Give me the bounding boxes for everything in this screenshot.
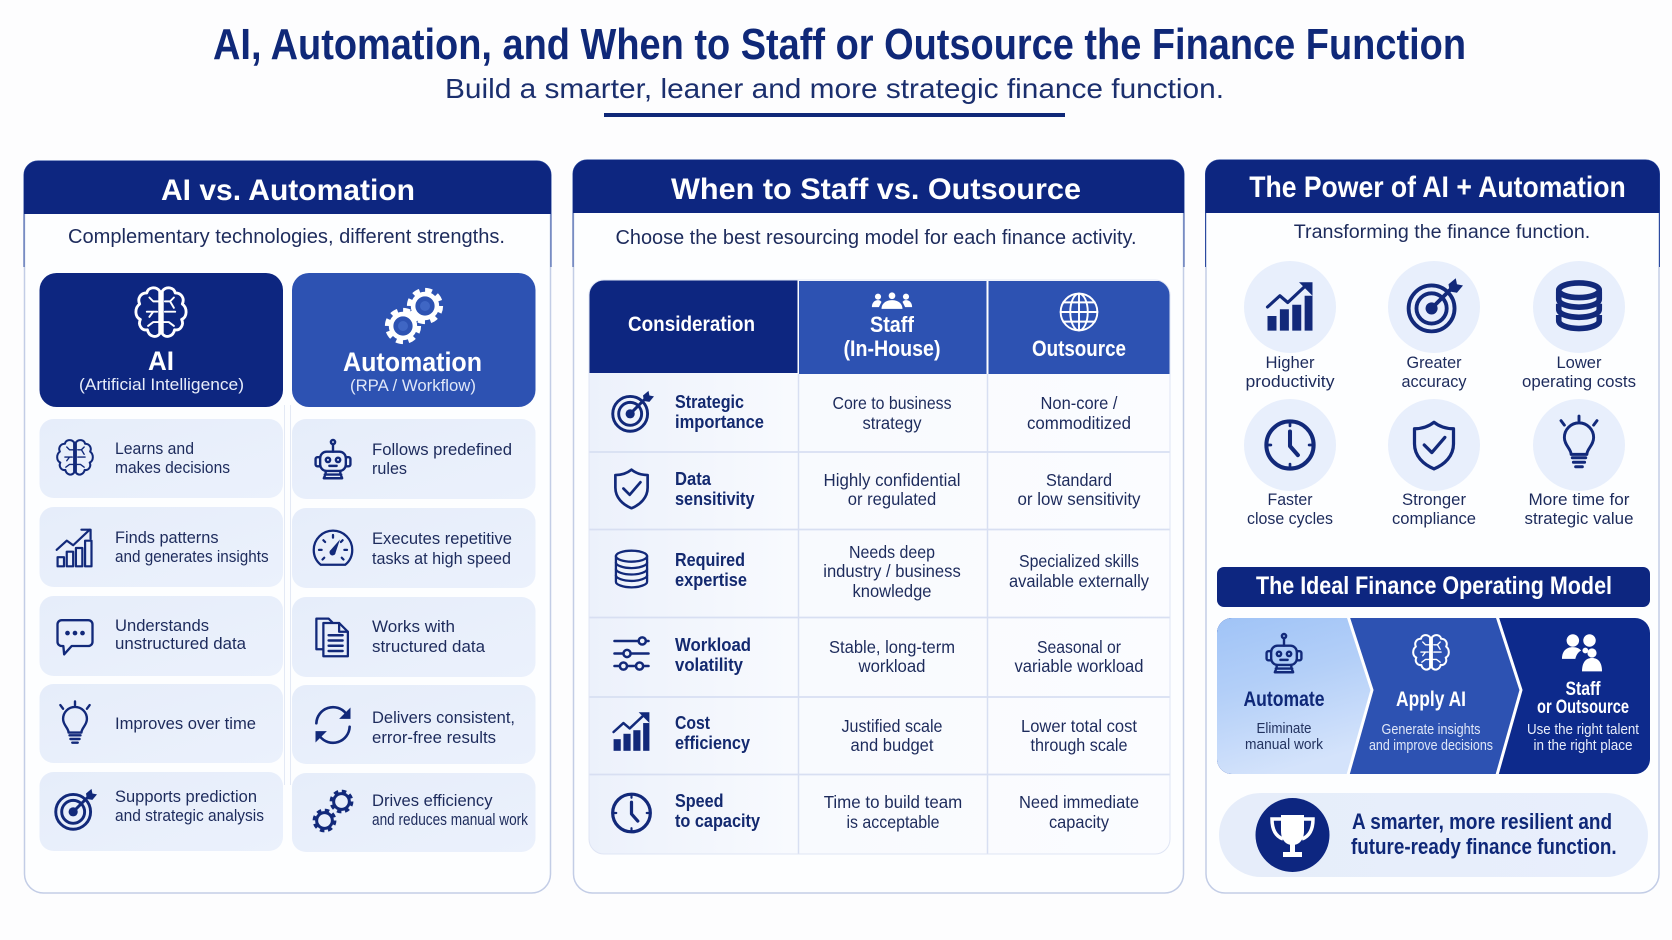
step: Staff or Outsource: Staff [1566, 679, 1601, 700]
text [115, 616, 247, 653]
benefit: Faster close cycles: Faster [1268, 490, 1313, 509]
outsource cell: Non-core / [1040, 393, 1118, 413]
chevron flow: operating model [1217, 618, 1650, 774]
benefit: Higher productivity: productivity [1246, 372, 1335, 391]
panel: The Power of AI + Automation [1190, 160, 1660, 893]
table header: Staff (In-House) [844, 292, 940, 361]
icon: cycle arrows [316, 707, 350, 743]
table header: Outsource: Outsource [1032, 336, 1126, 361]
benefit: Stronger compliance: compliance [1392, 509, 1476, 528]
outsource cell [1018, 470, 1141, 509]
text: Supports prediction [115, 787, 257, 806]
staff cell [832, 393, 952, 433]
column divider [284, 405, 290, 785]
consideration: to capacity [675, 811, 760, 831]
outcome text [1351, 809, 1617, 859]
text: unstructured data [115, 634, 247, 653]
icon: chat [58, 620, 92, 654]
outsource cell: variable workload [1014, 656, 1144, 676]
text: error-free results [372, 728, 496, 747]
text: structured data [372, 637, 486, 656]
outsource cell: or low sensitivity [1018, 489, 1141, 509]
table row: Strategic importance [613, 391, 1131, 433]
panel heading: When to Staff vs. Outsource [671, 173, 1081, 206]
benefit: Stronger compliance: Stronger [1402, 490, 1466, 509]
text: Drives efficiency [372, 791, 493, 810]
text: Improves over time [115, 714, 256, 733]
text: and generates insights [115, 547, 269, 566]
icon: gears [314, 791, 352, 831]
row: Executes repetitive tasks [292, 508, 536, 588]
icon: shield [615, 470, 648, 508]
staff cell: industry / business [823, 561, 961, 581]
outsource cell: through scale [1030, 735, 1128, 755]
outcome text: A smarter, more resilient and [1352, 809, 1612, 834]
staff cell [829, 637, 955, 676]
step: Staff or Outsource: Use the right talent [1527, 722, 1639, 738]
icon: sliders [614, 637, 649, 670]
table row: Data sensitivity [615, 469, 1141, 509]
icon: chart [57, 530, 92, 566]
staff cell: Highly confidential [824, 470, 960, 490]
consideration: importance [675, 412, 764, 432]
outcome pill [1219, 793, 1648, 877]
benefit: Lower operating costs [1522, 261, 1636, 391]
benefit: Higher productivity [1244, 261, 1336, 391]
staff cell: and budget [850, 735, 934, 755]
benefit: Higher productivity: Higher [1266, 353, 1315, 372]
row: Supports prediction [40, 772, 283, 851]
text: Learns and [115, 439, 194, 458]
step: Automate: manual work [1245, 737, 1324, 753]
section bar: The Ideal Finance Operating Model: The Ideal Finance Operating Model [1256, 572, 1612, 600]
table row: Cost efficiency [614, 712, 1137, 755]
row: Learns and makes decisions [40, 419, 283, 498]
outsource cell: Need immediate [1019, 792, 1139, 812]
staff cell: Stable, long-term [829, 637, 955, 657]
consideration: Workload [675, 635, 751, 655]
staff cell [824, 470, 960, 509]
benefit: Greater accuracy: Greater [1406, 353, 1462, 372]
outsource cell: Lower total cost [1021, 716, 1137, 736]
icon: gauge [314, 531, 352, 565]
card: AI [40, 273, 283, 407]
text [372, 791, 528, 829]
outcome text: future-ready finance function. [1351, 834, 1617, 859]
benefit: Lower operating costs: operating costs [1522, 372, 1636, 391]
icon: bulb [60, 701, 90, 743]
staff cell: Justified scale [842, 716, 942, 736]
outsource cell: capacity [1049, 812, 1109, 832]
icon: document [316, 619, 348, 656]
outsource cell: commoditized [1027, 413, 1131, 433]
table header: Consideration: Consideration [628, 313, 755, 336]
consideration [675, 392, 764, 432]
table row: Workload volatility [614, 635, 1144, 676]
consideration [675, 469, 754, 509]
row: Follows predefined rules [292, 419, 536, 499]
text: Understands [115, 616, 209, 635]
outsource cell: Specialized skills [1019, 551, 1139, 571]
step: Apply AI: and improve decisions [1369, 738, 1493, 754]
consideration: Speed [675, 791, 724, 811]
AI sublabel: (Artificial Intelligence) [79, 375, 244, 394]
panel subheading: Choose the best resourcing model for each finance activity. [616, 227, 1136, 249]
comparison table [589, 280, 1170, 854]
panel subheading: Complementary technologies, different strengths. [68, 226, 505, 248]
consideration: Data [675, 469, 712, 489]
text: Follows predefined [372, 440, 512, 459]
text [372, 708, 515, 747]
table row: Required expertise [616, 542, 1149, 601]
step: Apply AI: Apply AI [1396, 688, 1466, 711]
row: Drives efficiency [292, 773, 536, 852]
icon: trophy [1256, 798, 1330, 872]
text: Delivers consistent, [372, 708, 515, 727]
staff cell: is acceptable [846, 812, 940, 832]
staff cell: or regulated [848, 489, 936, 509]
staff cell: Needs deep [849, 542, 935, 562]
title: AI, Automation, and When to Staff or Outsource the Finance Function [213, 20, 1466, 69]
section bar: The Ideal Finance Operating Model [1217, 567, 1650, 607]
benefit: Greater accuracy: accuracy [1402, 372, 1467, 391]
text: Works with [372, 617, 455, 636]
outsource cell [1027, 393, 1131, 433]
table header: Outsource [1032, 294, 1126, 361]
benefit: More time for strategic value [1524, 399, 1634, 528]
panel heading: The Power of AI + Automation [1249, 171, 1626, 204]
text: tasks at high speed [372, 549, 511, 568]
outsource cell [1014, 637, 1144, 676]
table header: Staff (In-House): Staff [870, 312, 915, 337]
subtitle: Build a smarter, leaner and more strategic finance function. [445, 73, 1224, 104]
consideration [675, 550, 747, 590]
outsource cell [1009, 551, 1149, 591]
benefit: Greater accuracy [1388, 261, 1480, 391]
table header: Staff (In-House): (In-House) [844, 336, 940, 361]
staff cell: strategy [862, 413, 922, 433]
consideration: Cost [675, 713, 710, 733]
staff cell [824, 792, 962, 832]
row: Works with structured data [292, 597, 536, 677]
icon: brain [57, 440, 93, 475]
row: Delivers consistent results [292, 685, 536, 764]
benefit: More time for strategic value: strategic value [1524, 509, 1634, 528]
row: Understands unstructured data [40, 596, 283, 676]
text [115, 528, 269, 566]
consideration: expertise [675, 570, 747, 590]
staff cell: workload [858, 656, 926, 676]
panel subheading: Transforming the finance function. [1294, 222, 1590, 243]
consideration: sensitivity [675, 489, 754, 509]
staff cell [842, 716, 942, 755]
title underline [604, 113, 1065, 117]
step: Automate: Eliminate [1256, 721, 1312, 737]
icon: coins [616, 551, 647, 587]
text: Executes repetitive [372, 529, 512, 548]
text: makes decisions [115, 458, 230, 477]
consideration: efficiency [675, 733, 750, 753]
icon: target [613, 391, 654, 431]
card: Automation [292, 273, 536, 407]
AI label: AI [148, 346, 174, 376]
table row: Speed to capacity [613, 791, 1139, 832]
step: Apply AI: Generate insights [1382, 722, 1480, 738]
row: Finds patterns [40, 507, 283, 587]
icon: bar chart [614, 712, 649, 751]
consideration [675, 791, 760, 831]
step: Apply AI [1369, 635, 1493, 754]
Automation sublabel: (RPA / Workflow) [350, 376, 476, 395]
row: Improves over time [40, 684, 283, 763]
staff cell: Time to build team [824, 792, 962, 812]
text [372, 529, 512, 568]
panel: AI vs. Automation [24, 161, 551, 893]
staff cell: Core to business [832, 393, 952, 413]
outsource cell [1019, 792, 1139, 832]
staff cell: knowledge [852, 581, 932, 601]
benefit: More time for strategic value: More time for [1528, 490, 1630, 509]
text [372, 617, 486, 656]
outsource cell: Standard [1046, 470, 1112, 490]
outsource cell: available externally [1009, 571, 1149, 591]
text: rules [372, 459, 407, 478]
benefit: Stronger compliance [1388, 399, 1480, 528]
consideration [675, 635, 751, 675]
panel: When to Staff vs. Outsource [573, 160, 1184, 893]
consideration: Strategic [675, 392, 744, 412]
text [372, 440, 512, 478]
step: Automate: Automate [1244, 688, 1324, 711]
text [115, 787, 264, 825]
benefit: Faster close cycles: close cycles [1247, 509, 1333, 528]
consideration [675, 713, 750, 753]
icon: brain [136, 288, 186, 336]
benefit: Lower operating costs: Lower [1556, 353, 1602, 372]
Automation label: Automation [343, 347, 482, 377]
text: and reduces manual work [372, 810, 528, 829]
step: Staff or Outsource: or Outsource [1537, 697, 1629, 718]
consideration: volatility [675, 655, 743, 675]
text: and strategic analysis [115, 806, 264, 825]
step: Staff or Outsource: in the right place [1534, 738, 1632, 754]
text: Finds patterns [115, 528, 218, 547]
benefit: Faster close cycles [1244, 399, 1336, 528]
consideration: Required [675, 550, 745, 570]
icon: robot [316, 440, 350, 478]
icon: gears [387, 290, 441, 342]
icon: target [56, 789, 97, 829]
step: Staff or Outsource [1527, 634, 1639, 754]
staff cell [823, 542, 961, 601]
step: Automate [1244, 634, 1324, 753]
outsource cell [1021, 716, 1137, 755]
icon: clock [613, 794, 650, 832]
text [115, 439, 230, 477]
outsource cell: Seasonal or [1037, 637, 1121, 657]
panel heading: AI vs. Automation [161, 174, 415, 207]
